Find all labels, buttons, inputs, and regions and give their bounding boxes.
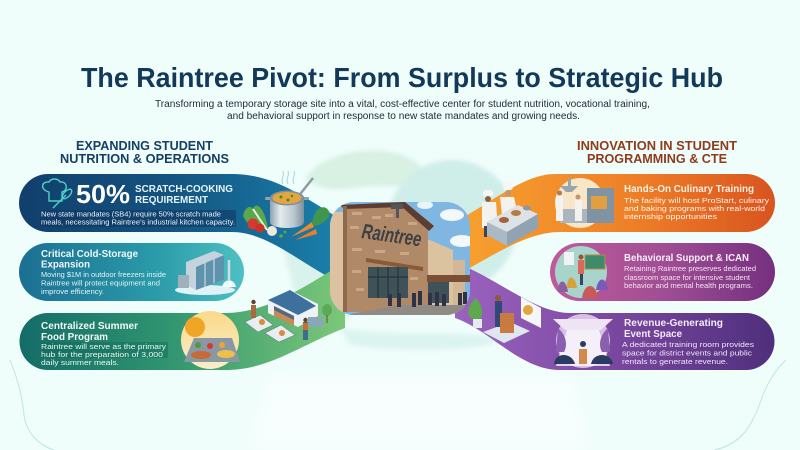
body text bbox=[41, 272, 166, 296]
body text: rentals to generate revenue. bbox=[622, 359, 728, 366]
body text: Raintree will serve as the primary bbox=[41, 344, 167, 351]
body text bbox=[41, 212, 235, 226]
icon: event room circle bbox=[553, 314, 613, 368]
left heading bbox=[60, 138, 229, 166]
body text: classroom space for intensive student bbox=[624, 275, 750, 282]
body text: Raintree will protect equipment and bbox=[41, 280, 160, 288]
body text: New state mandates (SB4) require 50% scratch made bbox=[41, 212, 221, 218]
heading: cold storage: Expansion bbox=[41, 260, 90, 270]
heading: summer food bbox=[41, 321, 138, 343]
heading: summer food: Centralized Summer bbox=[41, 321, 138, 332]
heading: event space: Revenue-Generating bbox=[624, 318, 723, 329]
icon: classroom circle bbox=[555, 246, 608, 298]
heading: cold storage bbox=[41, 249, 138, 270]
body text bbox=[622, 342, 755, 366]
body text: and baking programs with real-world bbox=[624, 206, 765, 213]
body text bbox=[41, 344, 167, 367]
body text: meals, necessitating Raintree's industrial kitchen capacity. bbox=[41, 220, 235, 226]
icon: kitchen circle bbox=[555, 178, 614, 228]
body text: Retaining Raintree preserves dedicated bbox=[624, 266, 756, 273]
body text: The facility will host ProStart, culinary bbox=[624, 198, 770, 205]
body text bbox=[624, 266, 756, 290]
body text: space for district events and public bbox=[622, 350, 753, 358]
heading: culinary training: Hands-On Culinary Training bbox=[624, 184, 754, 195]
icon: warehouse, trays and staff bbox=[245, 290, 332, 342]
panel: behavioral support bbox=[550, 243, 775, 301]
panel: hands-on culinary training bbox=[455, 174, 775, 276]
icon: sun and meal tray bbox=[181, 311, 240, 369]
heading: event space bbox=[624, 318, 723, 340]
body text bbox=[624, 198, 770, 221]
icon: speaker at podium bbox=[468, 295, 541, 343]
decorative corner lines bbox=[10, 360, 786, 450]
body text: Moving $1M in outdoor freezers inside bbox=[41, 272, 166, 279]
heading: behavioral support: Behavioral Support & ICAN bbox=[624, 253, 749, 264]
right heading bbox=[577, 138, 737, 166]
panel: cold-storage expansion bbox=[19, 243, 244, 301]
left heading: NUTRITION & OPERATIONS bbox=[60, 151, 229, 166]
body text: daily summer meals. bbox=[41, 360, 119, 367]
right heading: INNOVATION IN STUDENT bbox=[577, 138, 737, 153]
subtitle: Transforming a temporary storage site into a vital, cost-effective center for student nutrition, vocational training, bbox=[155, 99, 650, 110]
center illustration: Raintree building bbox=[330, 201, 474, 315]
icon: freezers bbox=[175, 251, 236, 295]
body text: hub for the preparation of 3,000 bbox=[41, 352, 163, 359]
heading: scratch-cooking requirement bbox=[135, 184, 233, 206]
left heading: EXPANDING STUDENT bbox=[76, 138, 213, 153]
panel: revenue-generating event space bbox=[455, 262, 774, 370]
body text: internship opportunities bbox=[624, 214, 718, 221]
heading: summer food: Food Program bbox=[41, 332, 108, 343]
panel: scratch-cooking requirement bbox=[19, 171, 345, 285]
panel: summer food program bbox=[20, 262, 345, 370]
icon: chef hat and whisk bbox=[43, 179, 73, 208]
title: The Raintree Pivot: From Surplus to Strategic Hub bbox=[81, 62, 723, 93]
heading: scratch-cooking requirement: REQUIREMENT bbox=[135, 195, 208, 206]
icon: soup pot and vegetables bbox=[243, 171, 329, 240]
sign: Raintree: Raintree bbox=[360, 220, 423, 251]
subtitle bbox=[155, 99, 650, 122]
stat: 50%: 50% bbox=[76, 179, 130, 209]
right heading: PROGRAMMING & CTE bbox=[587, 151, 727, 166]
subtitle: and behavioral support in response to new state mandates and growing needs. bbox=[227, 111, 580, 122]
heading: cold storage: Critical Cold-Storage bbox=[41, 249, 138, 260]
heading: event space: Event Space bbox=[624, 329, 682, 340]
background blobs bbox=[250, 150, 590, 450]
body text: behavior and mental health programs. bbox=[624, 283, 753, 290]
icon: chefs at counter bbox=[482, 183, 538, 246]
body text: improve efficiency. bbox=[41, 289, 104, 296]
heading: scratch-cooking requirement: SCRATCH-COOKING bbox=[135, 184, 233, 195]
body text: A dedicated training room provides bbox=[622, 342, 755, 349]
